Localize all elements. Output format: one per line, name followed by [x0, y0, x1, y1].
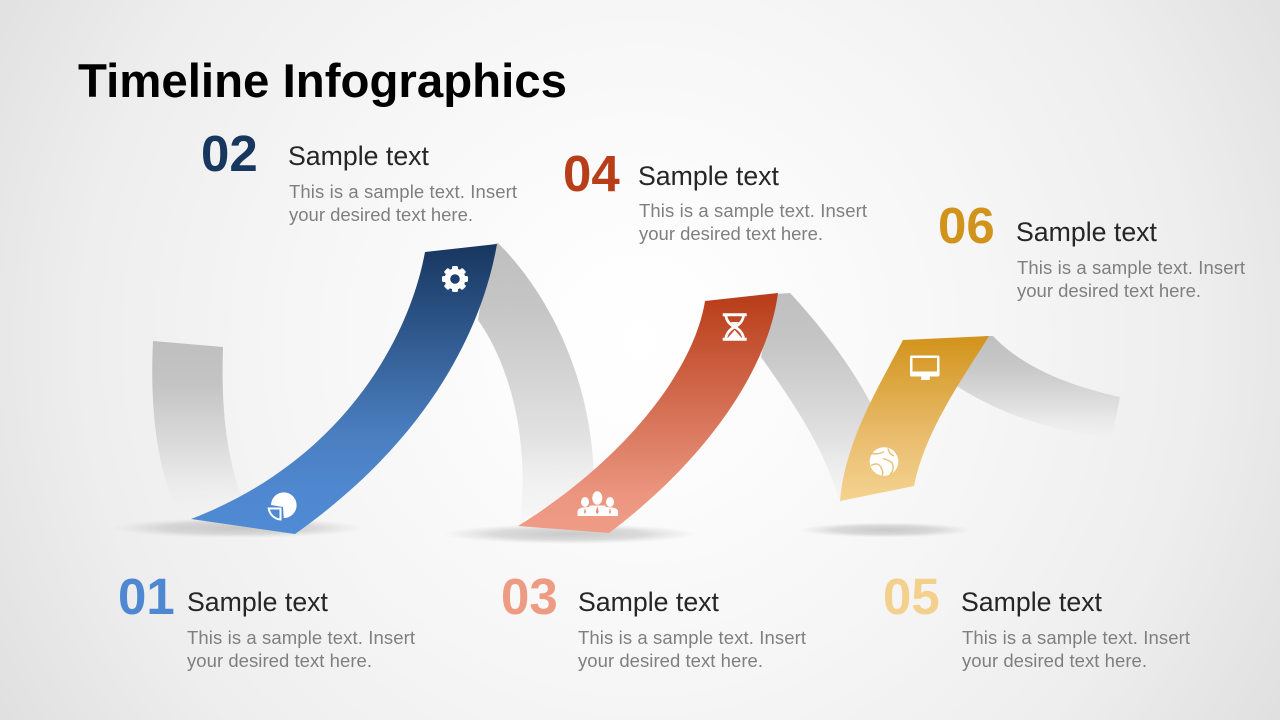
heading 01: Sample text: [187, 587, 329, 617]
icon: hourglass: [723, 315, 747, 339]
icon: globe: [870, 447, 898, 476]
floor shadows: [111, 518, 973, 544]
number 06: 06: [938, 197, 995, 254]
ribbon segment: blue: [191, 244, 497, 534]
step 03 text: [501, 568, 806, 671]
icon: gear: [442, 266, 468, 292]
description 04: your desired text here.: [639, 223, 823, 244]
number 03: 03: [501, 568, 558, 625]
number 04: 04: [563, 145, 620, 202]
number 05: 05: [883, 568, 940, 625]
icon: pie chart: [269, 492, 297, 520]
grey ribbon: fold between 02 and 03: [478, 243, 594, 522]
description 01: This is a sample text. Insert: [187, 627, 415, 648]
description 02: your desired text here.: [289, 204, 473, 225]
heading 04: Sample text: [638, 161, 780, 191]
ribbon segment: red: [518, 293, 778, 533]
description 06: your desired text here.: [1017, 280, 1201, 301]
heading 06: Sample text: [1016, 217, 1158, 247]
description 02: This is a sample text. Insert: [289, 181, 517, 202]
grey ribbon: end fold: [952, 336, 1120, 438]
step 01 text: [118, 568, 415, 671]
heading 02: Sample text: [288, 141, 430, 171]
heading 03: Sample text: [578, 587, 720, 617]
description 05: This is a sample text. Insert: [962, 627, 1190, 648]
step 04 text: [563, 145, 867, 244]
number 01: 01: [118, 568, 175, 625]
grey ribbon: fold between 04 and 05: [761, 293, 875, 500]
icon: monitor: [910, 356, 940, 380]
heading 05: Sample text: [961, 587, 1103, 617]
icon: people: [578, 491, 618, 516]
ribbon segment: gold: [840, 336, 989, 501]
step 06 text: [938, 197, 1245, 301]
number 02: 02: [201, 125, 258, 182]
description 01: your desired text here.: [187, 650, 372, 671]
description 04: This is a sample text. Insert: [639, 200, 867, 221]
step 02 text: [201, 125, 517, 225]
description 06: This is a sample text. Insert: [1017, 257, 1245, 278]
description 03: This is a sample text. Insert: [578, 627, 806, 648]
grey ribbon: start fold: [152, 341, 246, 516]
step 05 text: [883, 568, 1190, 671]
description 03: your desired text here.: [578, 650, 763, 671]
title: Timeline Infographics: [78, 54, 567, 107]
description 05: your desired text here.: [962, 650, 1147, 671]
